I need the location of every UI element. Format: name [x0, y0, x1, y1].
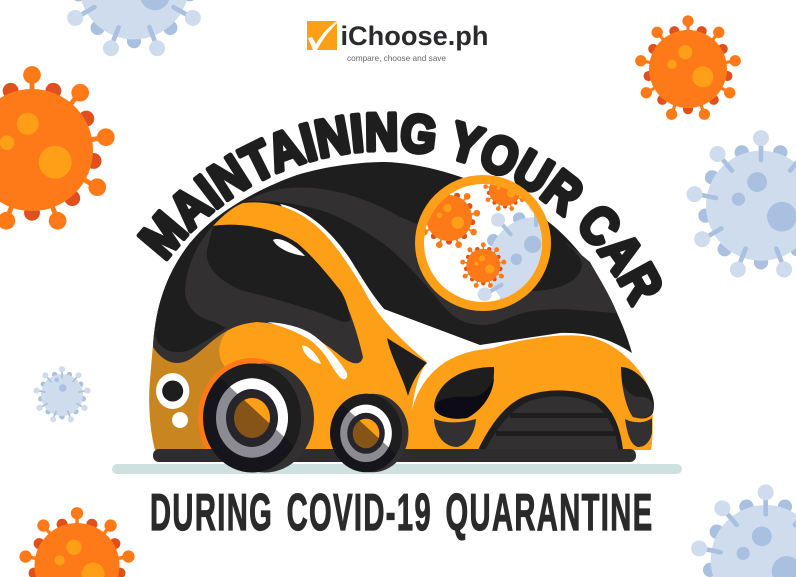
body glare leaf	[302, 346, 321, 364]
virus: top left blue	[59, 0, 209, 56]
logo tagline: compare, choose and save	[347, 53, 446, 63]
virus: bottom left orange	[19, 507, 135, 577]
car illustration	[149, 162, 654, 478]
logo wordmark: iChoose.ph	[340, 21, 488, 51]
subtitle: During COVID-19 Quarantine: DURING COVID-19 QUARANTINE	[150, 483, 654, 541]
roof black lobe behind lens	[500, 215, 582, 291]
logo icon: orange square with check	[307, 21, 337, 50]
front side window	[387, 338, 427, 396]
virus: small blue	[34, 366, 90, 422]
rear wheel	[203, 364, 314, 472]
logo: iChoose.ph	[307, 21, 488, 63]
virus: top right orange	[635, 15, 741, 120]
side window grey base	[153, 225, 363, 363]
car body orange	[149, 202, 653, 450]
window glare	[273, 239, 305, 256]
rear window black lobe	[155, 226, 226, 352]
virus: left orange	[0, 66, 115, 230]
roof grey swirl	[247, 187, 617, 325]
front left lower lobe	[434, 419, 476, 447]
title: Maintaining Your Car (arched): MAINTAINING YOUR CAR	[136, 111, 662, 308]
white stripe	[280, 204, 652, 420]
car roof dark base	[153, 162, 632, 360]
magnifying lens with viruses	[415, 175, 551, 311]
rear lights	[156, 373, 189, 428]
bumper / underbody bar	[153, 449, 636, 462]
rear darker orange panel	[149, 325, 235, 450]
front left headlight	[434, 367, 494, 419]
virus: right blue	[686, 130, 796, 277]
side window black pane	[207, 225, 350, 322]
front wheel	[330, 394, 408, 472]
rear wheel arch	[198, 358, 278, 449]
ground shadow bar	[112, 464, 682, 474]
body glare swoosh	[267, 322, 347, 379]
virus: bottom right blue	[691, 484, 796, 577]
front right lower lobe	[625, 418, 652, 447]
grille	[478, 390, 623, 450]
front right headlight	[621, 367, 654, 418]
